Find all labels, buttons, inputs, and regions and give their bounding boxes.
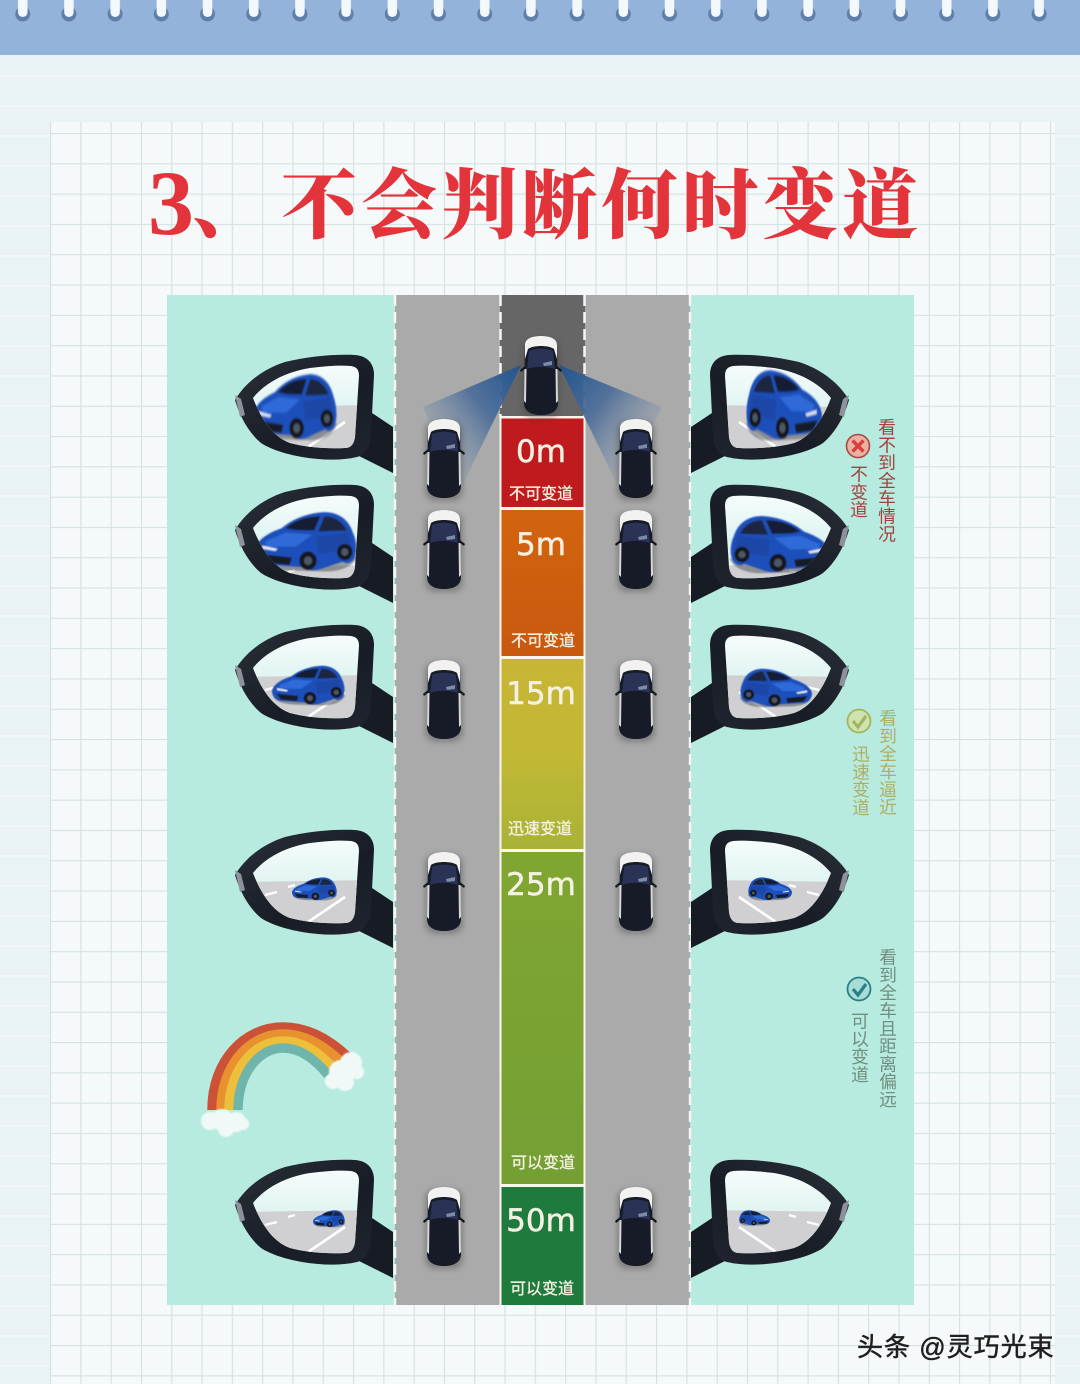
icon: check yellow-green	[848, 710, 870, 732]
panel: mint background	[167, 295, 914, 1305]
icon: check teal	[848, 978, 870, 1000]
cars: right lane	[615, 419, 657, 1269]
annotation: can change lane: 看到全车且距离偏远	[877, 948, 897, 1108]
top binding band	[0, 0, 1080, 55]
annotation: can change lane	[848, 948, 897, 1108]
right mirror 0m	[691, 355, 849, 473]
blind spot cone: left	[423, 365, 521, 490]
annotation: cannot change lane: 看不到全车情况	[876, 418, 896, 543]
panel: road	[395, 295, 690, 1305]
icon: cross	[846, 434, 870, 458]
title: 3	[148, 152, 194, 254]
watermark: 头条 @灵巧光束	[857, 1332, 1055, 1362]
car: ego vehicle	[520, 336, 562, 418]
segment: 50m: 可以变道	[510, 1280, 574, 1298]
annotation: cannot change lane	[846, 418, 896, 543]
distance scale column	[500, 416, 586, 1305]
segment: 25m	[502, 852, 584, 1184]
annotation: change lane quickly: 看到全车逼近	[877, 709, 897, 816]
segment: 5m	[502, 510, 584, 656]
segment: 50m	[502, 1187, 584, 1305]
segment: 15m: 迅速变道	[508, 820, 572, 838]
segment: 5m: 5m	[516, 527, 566, 563]
clouds	[201, 1052, 364, 1137]
blind spot cone: right	[559, 365, 662, 490]
annotation: change lane quickly	[848, 709, 897, 816]
right mirror 5m	[691, 484, 849, 603]
segment: 5m: 不可变道	[511, 632, 575, 650]
segment: 0m	[502, 418, 584, 507]
segment: 50m: 50m	[506, 1203, 576, 1239]
segment: 25m: 25m	[506, 867, 576, 903]
rainbow	[201, 1027, 364, 1137]
left mirror 5m	[235, 484, 393, 603]
title: 不会判断何时变道	[281, 164, 923, 249]
left mirror 0m	[235, 355, 393, 473]
right mirror 15m	[691, 625, 849, 743]
segment: 0m: 0m	[516, 434, 566, 470]
annotation: change lane quickly: 迅速变道	[850, 745, 870, 816]
segment: 15m	[502, 659, 584, 849]
annotation: cannot change lane: 不变道	[848, 465, 868, 518]
left mirror 25m	[235, 830, 393, 948]
segment: 15m: 15m	[506, 676, 576, 712]
cars: left lane	[423, 419, 465, 1269]
right mirror 50m	[691, 1160, 849, 1278]
left mirror 50m	[235, 1160, 393, 1278]
segment: 25m: 可以变道	[511, 1154, 575, 1172]
right mirror 25m	[691, 830, 849, 948]
annotation: can change lane: 可以变道	[849, 1012, 869, 1083]
segment: 0m: 不可变道	[509, 485, 573, 503]
title: 、	[192, 165, 268, 249]
left mirror 15m	[235, 625, 393, 743]
